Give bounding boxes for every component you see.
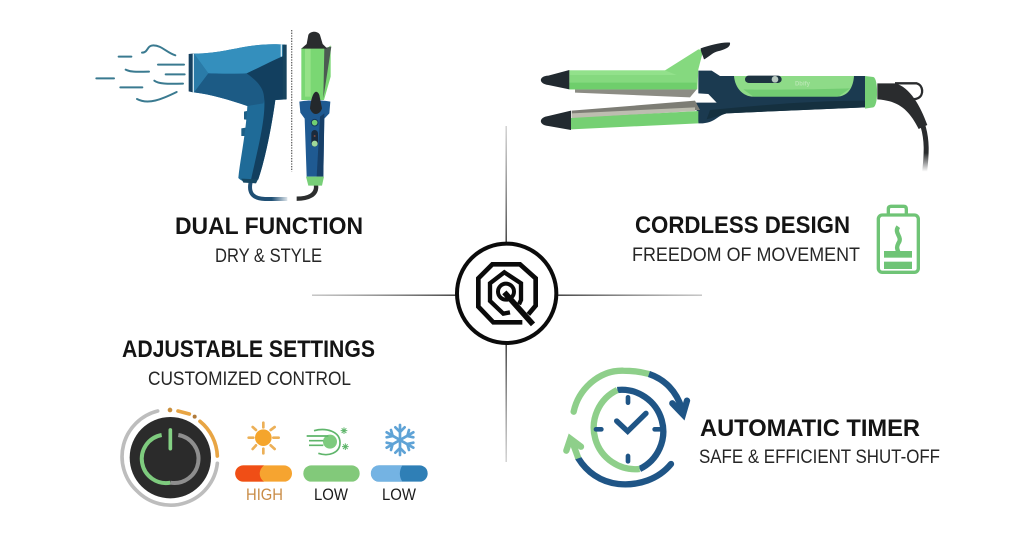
subheading: dry and style: DRY & STYLE — [215, 246, 322, 267]
subheading: safe and efficient shut-off: SAFE & EFFICIENT SHUT-OFF — [699, 447, 940, 468]
dotted separator — [290, 30, 294, 172]
panel: automatic timer — [566, 371, 940, 484]
panel: cordless design — [541, 42, 927, 272]
icon: airflow lines — [96, 45, 185, 102]
center logo badge — [457, 244, 556, 343]
subheading: customized control: CUSTOMIZED CONTROL — [148, 369, 351, 390]
bar: low warm — [303, 465, 360, 482]
divider cross — [312, 126, 702, 462]
heading: automatic timer: AUTOMATIC TIMER — [700, 415, 920, 442]
heading: dual function: DUAL FUNCTION — [175, 213, 363, 240]
icon: snowflake — [387, 425, 413, 455]
panel: adjustable settings — [122, 336, 428, 505]
bar: low cool — [371, 465, 428, 482]
icon: upright styler — [297, 32, 331, 199]
label: low warm: LOW — [314, 485, 348, 504]
icon: warm air — [307, 427, 349, 455]
icon: battery — [878, 206, 918, 272]
panel: dual function — [96, 30, 363, 267]
label: low cool: LOW — [382, 485, 416, 504]
heading: cordless design: CORDLESS DESIGN — [635, 212, 850, 239]
icon: horizontal curling iron — [541, 42, 927, 172]
icon: sun heat — [249, 423, 279, 453]
heading: adjustable settings: ADJUSTABLE SETTINGS — [122, 336, 375, 363]
icon: power dial — [122, 408, 217, 505]
icon: clock with cycle arrows — [566, 371, 687, 484]
icon: horizontal curling iron: Dbify — [795, 81, 811, 87]
subheading: freedom of movement: FREEDOM OF MOVEMENT — [632, 245, 860, 266]
icon: hair dryer — [189, 44, 287, 199]
bar: high heat — [235, 465, 292, 482]
label: high: HIGH — [246, 485, 283, 504]
